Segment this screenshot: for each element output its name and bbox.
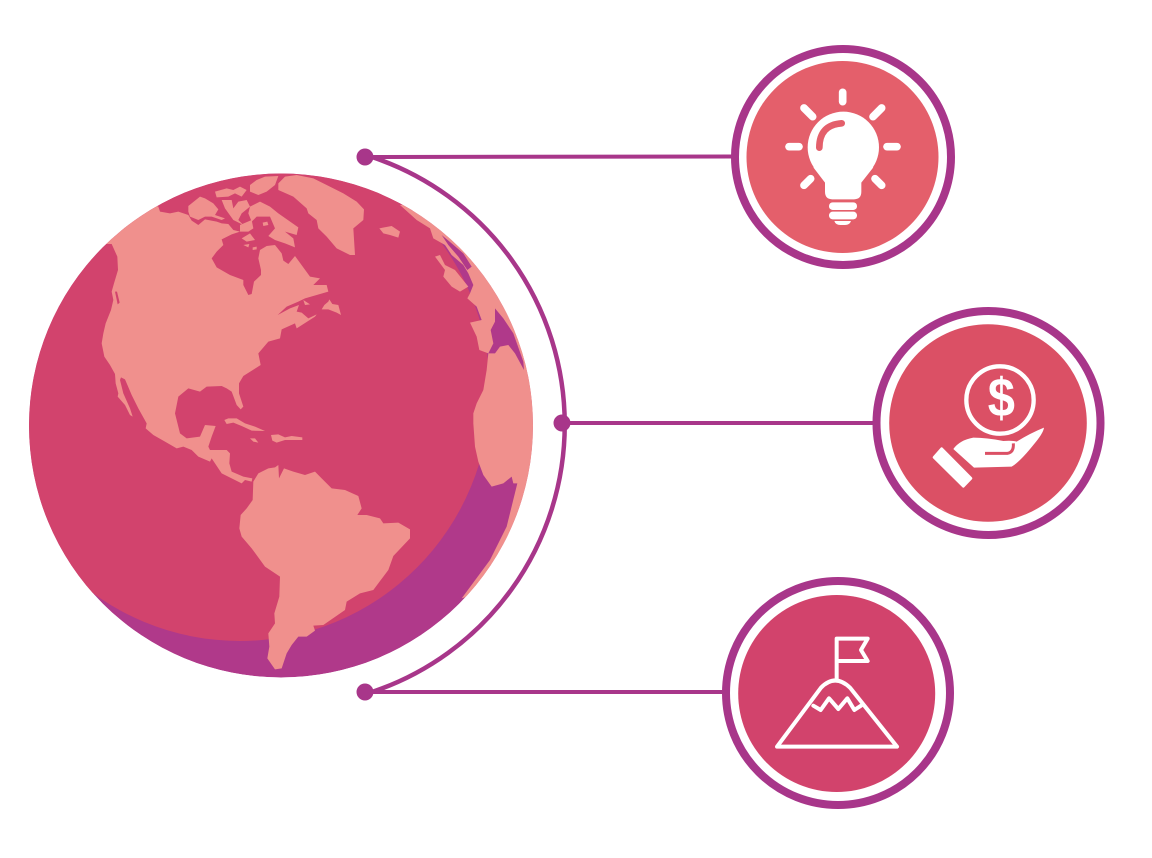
Somerset group — [222, 200, 250, 225]
Vancouver strait — [115, 292, 120, 304]
Europe and Africa — [400, 205, 533, 598]
Iceland — [379, 226, 400, 238]
icon: light bulb — [789, 92, 897, 225]
ocean — [29, 174, 488, 641]
small bay islets — [243, 244, 257, 250]
Hispaniola — [271, 434, 302, 443]
Cuba — [224, 418, 265, 431]
Nova Scotia islet — [303, 300, 310, 305]
Melville group — [215, 187, 247, 197]
badge: mountain flag — [726, 581, 950, 805]
connector dots — [356, 148, 570, 700]
connector arc — [372, 157, 565, 692]
South America — [239, 465, 410, 669]
Ellesmere group — [250, 176, 278, 195]
badge: light bulb — [735, 49, 951, 265]
Victoria Island — [188, 197, 225, 220]
connector lines — [365, 156, 880, 692]
Melville Peninsula — [240, 220, 253, 232]
icon: coin over hand — [934, 366, 1044, 486]
Mediterranean patch — [488, 308, 524, 370]
icon: mountain with flag — [777, 639, 897, 747]
Baltic sliver — [442, 235, 472, 270]
icon: coin over hand: $ — [988, 367, 1015, 428]
badge: money in hand — [876, 311, 1100, 535]
globe shadow base — [29, 174, 533, 678]
Greenland — [278, 175, 364, 255]
North and Central America — [102, 206, 341, 484]
Baffin Island — [248, 202, 298, 247]
Newfoundland — [322, 299, 341, 315]
Foxe Basin island — [263, 222, 268, 226]
Southampton Island — [242, 233, 255, 242]
South America, Iceland, Europe and Africa — [239, 205, 533, 670]
globe — [29, 174, 533, 678]
Arctic islands and Greenland — [188, 175, 364, 255]
British Isles — [435, 255, 468, 292]
mainland — [102, 206, 328, 484]
Jamaica — [250, 438, 258, 443]
